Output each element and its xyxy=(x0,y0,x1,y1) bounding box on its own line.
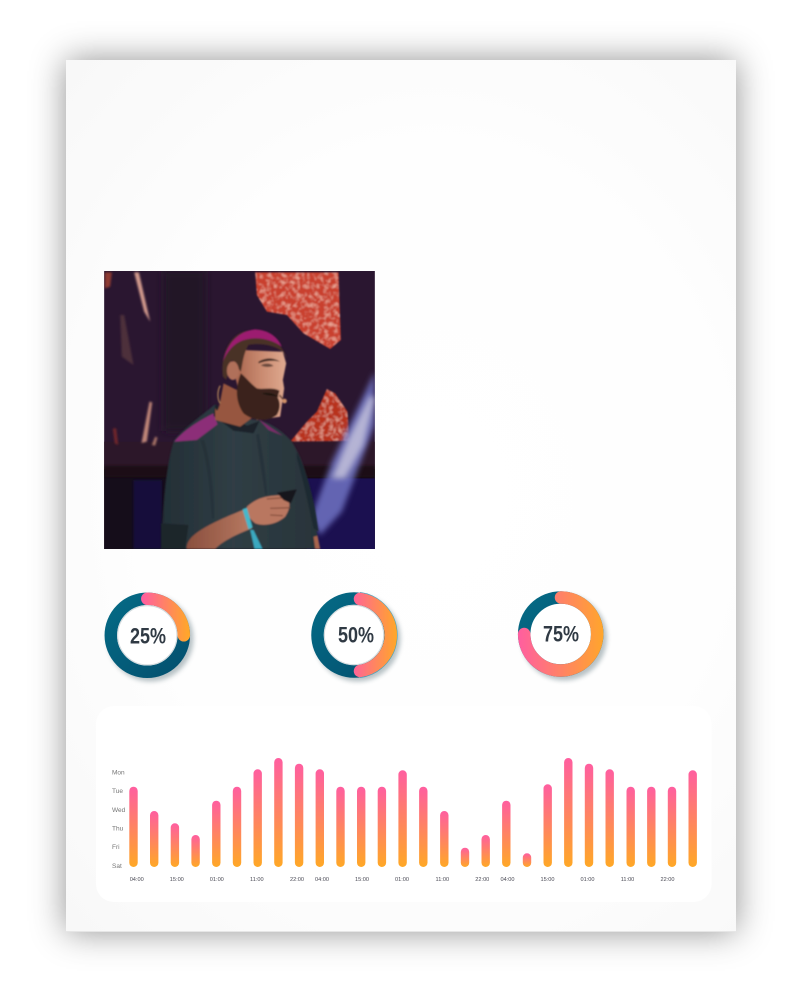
x axis time labels: 11:00 xyxy=(250,877,264,883)
headset mic xyxy=(218,386,220,403)
speaker photo xyxy=(104,271,375,549)
beard xyxy=(237,373,280,420)
y axis day labels: Sat xyxy=(112,863,122,870)
x axis time labels: 01:00 xyxy=(210,877,224,883)
y axis day labels: Tue xyxy=(112,788,123,795)
x axis time labels: 15:00 xyxy=(170,877,184,883)
hand xyxy=(247,495,289,525)
y axis day labels: Thu xyxy=(112,826,124,832)
panel: weekly activity bar chart xyxy=(112,758,697,883)
value label: 25% xyxy=(130,624,166,648)
y axis day labels: Mon xyxy=(112,770,125,776)
x axis time labels: 15:00 xyxy=(355,877,369,883)
shirt xyxy=(161,404,320,549)
x axis time labels xyxy=(130,877,674,883)
y axis day labels: Fri xyxy=(112,844,120,851)
light beam xyxy=(311,372,375,535)
head xyxy=(215,329,288,427)
x axis time labels: 22:00 xyxy=(475,877,489,883)
x axis time labels: 11:00 xyxy=(621,877,634,883)
person xyxy=(161,329,320,549)
x axis time labels: 04:00 xyxy=(315,877,329,883)
page sheet xyxy=(66,60,736,932)
x axis time labels: 04:00 xyxy=(500,877,514,883)
eye and brow xyxy=(258,358,280,363)
remote xyxy=(277,489,297,503)
donut chart: 50% xyxy=(311,592,403,684)
x axis time labels: 04:00 xyxy=(130,877,144,883)
ear xyxy=(227,361,239,380)
x axis time labels: 01:00 xyxy=(580,877,594,883)
x axis time labels: 11:00 xyxy=(436,877,449,883)
x axis time labels: 15:00 xyxy=(540,877,554,883)
x axis time labels: 22:00 xyxy=(660,877,674,883)
bars xyxy=(129,758,697,867)
hair xyxy=(222,330,288,380)
y axis day labels: Wed xyxy=(112,807,126,814)
value label: 50% xyxy=(338,622,374,648)
x axis time labels: 01:00 xyxy=(395,877,409,883)
wristband and lanyard xyxy=(242,508,252,529)
value label: 75% xyxy=(543,622,579,646)
screen imagery xyxy=(255,272,350,442)
donut chart: 25% xyxy=(104,592,196,684)
donut chart: 75% xyxy=(518,591,610,683)
x axis time labels: 22:00 xyxy=(290,877,304,883)
forearm xyxy=(187,510,252,549)
y axis day labels xyxy=(112,770,126,870)
stage background xyxy=(104,271,375,549)
